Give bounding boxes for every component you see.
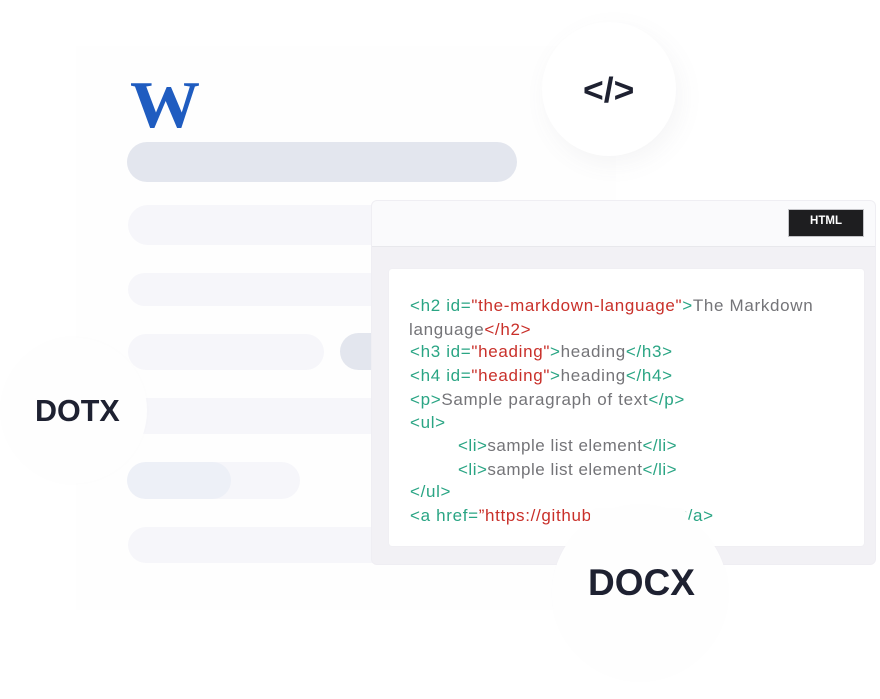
panel: word document [76, 46, 616, 610]
tab: HTML [788, 209, 864, 237]
panel: HTML code window [371, 200, 876, 565]
icon: word logo: W [130, 69, 200, 143]
document text bar 5 [128, 527, 428, 563]
progress fill [127, 462, 231, 499]
document text bar 3 [128, 334, 324, 370]
code area [389, 269, 864, 546]
window header [372, 201, 877, 247]
code line 6: <ul> [410, 413, 446, 432]
document accent pill [340, 333, 420, 370]
document text bar 4 [128, 398, 428, 434]
code line 10: <a href=”https://github.com/lin”>l</a> [410, 506, 714, 525]
label: DOTX: DOTX [35, 394, 120, 428]
badge: DOCX [552, 505, 728, 681]
code line 9: </ul> [410, 482, 451, 501]
document heading bar [127, 142, 517, 182]
code line 5: <p>Sample paragraph of text</p> [410, 390, 685, 409]
document text bar 2 [128, 273, 428, 306]
code line 3: <h3 id="heading">heading</h3> [410, 342, 673, 361]
code line 8: <li>sample list element</li> [458, 460, 677, 479]
document text bar 1 [128, 205, 428, 245]
document progress bar [127, 462, 300, 499]
badge: DOTX [2, 338, 147, 483]
badge top edge [590, 508, 687, 568]
code line 1: <h2 id="the-markdown-language">The Markdown [410, 296, 813, 315]
label: DOCX: DOCX [588, 562, 695, 603]
label: code symbol: </> [583, 70, 634, 110]
code line 7: <li>sample list element</li> [458, 436, 677, 455]
code line 4: <h4 id="heading">heading</h4> [410, 366, 673, 385]
tab: HTML: HTML [810, 215, 842, 227]
code line 2: language</h2> [409, 320, 531, 339]
badge: code symbol [542, 22, 676, 156]
